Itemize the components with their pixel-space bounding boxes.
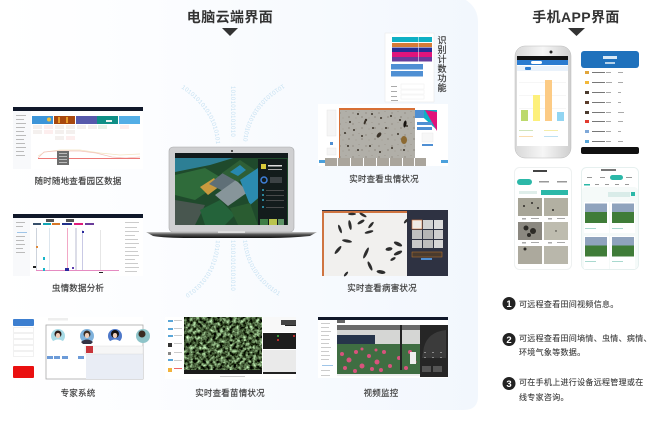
label: park data: 随时随地查看园区数据 — [34, 176, 122, 186]
background panel: computer cloud interface — [0, 0, 478, 410]
side label: recognition count function — [437, 36, 447, 93]
phone: crop photo gallery app — [582, 168, 638, 270]
side label: recognition count function: 功 — [437, 74, 447, 84]
feature note 1: 可远程查看田间视频信息。 — [519, 299, 619, 309]
feature note 1: 1 — [506, 299, 512, 310]
feature note 3 — [502, 377, 644, 402]
screenshot: real-time pest status — [318, 104, 448, 166]
feature note 3: 线专家咨询。 — [519, 392, 569, 402]
label: pest status: 实时查看虫情状况 — [349, 174, 419, 184]
feature note 3: 3 — [506, 379, 512, 390]
laptop with aerial map — [146, 147, 317, 238]
label: video monitoring: 视频监控 — [364, 388, 399, 398]
side label: recognition count function: 数 — [437, 63, 447, 74]
screenshot: real-time disease status — [322, 210, 448, 277]
feature note 1 — [502, 297, 619, 310]
binary data streams — [182, 84, 284, 298]
phone: pest photo gallery app — [514, 168, 572, 270]
label: expert system: 专家系统 — [61, 388, 96, 398]
screenshot: park data dashboard — [13, 107, 143, 169]
phone: bar chart app — [515, 46, 571, 158]
feature note 2: 2 — [506, 335, 512, 346]
binary data streams: 1010101010101010101010 — [186, 240, 220, 298]
heading: mobile app interface: 手机APP界面 — [532, 9, 620, 25]
feature note 2 — [502, 333, 652, 357]
label: crop status: 实时查看苗情状况 — [195, 388, 265, 398]
screenshot: pest data analysis — [13, 214, 143, 276]
screenshot: expert system — [13, 317, 150, 379]
screenshot: crop status — [165, 317, 296, 379]
label: disease status: 实时查看病害状况 — [347, 283, 417, 293]
heading: computer cloud interface — [187, 9, 273, 36]
feature note 3: 可在手机上进行设备远程管理或在 — [519, 377, 644, 387]
phone: meteorological monitoring app — [581, 51, 639, 154]
binary data streams: 10101010101010 — [231, 240, 236, 290]
side label: recognition count function: 计 — [437, 54, 447, 64]
feature note 2: 可远程查看田间墒情、虫情、病情、 — [519, 333, 652, 343]
side label: recognition count function: 识 — [437, 36, 447, 46]
heading: computer cloud interface: 电脑云端界面 — [187, 9, 273, 25]
feature note 2: 环境气象等数据。 — [519, 347, 585, 357]
heading: mobile app interface — [532, 9, 620, 36]
binary data streams: 1010101010101010101010 — [243, 240, 280, 296]
label: pest data analysis: 虫情数据分析 — [52, 283, 104, 293]
screenshot: video monitoring — [318, 317, 448, 378]
side label: recognition count function: 别 — [437, 45, 447, 55]
binary data streams: 10101010101010 — [231, 86, 236, 136]
side label: recognition count function: 能 — [437, 82, 447, 93]
recognition count popup — [385, 33, 434, 102]
